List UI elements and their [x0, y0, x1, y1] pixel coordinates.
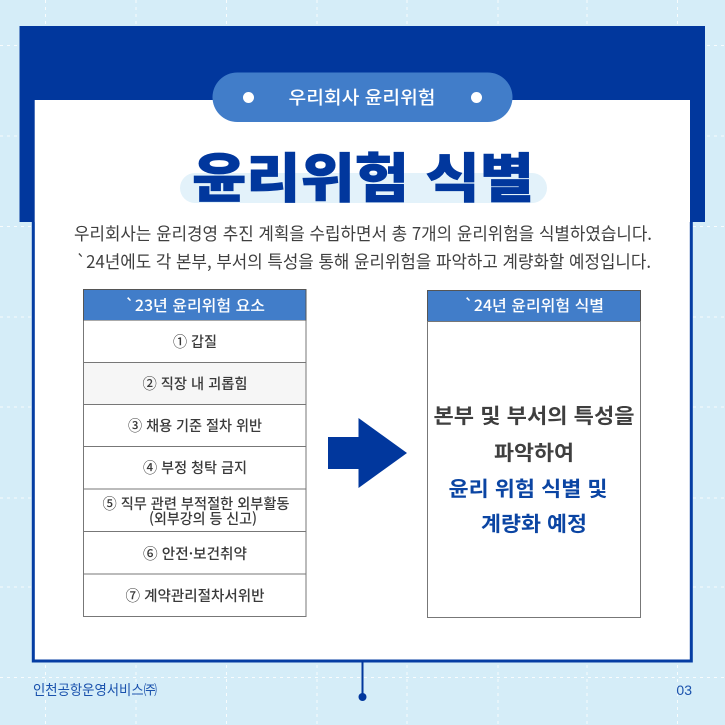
right table message: 윤리 위험 식별 및: [448, 472, 608, 502]
white card: [35, 100, 690, 660]
table rows: ② 직장 내 괴롭힘: [142, 373, 248, 394]
right table message: 계량화 예정: [481, 507, 587, 537]
footer company name: 인천공항운영서비스㈜: [33, 680, 157, 700]
pill badge: [212, 72, 512, 122]
table rows: ⑤ 직무 관련 부적절한 외부활동: [102, 493, 290, 514]
table rows: ⑥ 안전·보건취약: [143, 543, 247, 564]
right table message: [434, 399, 634, 537]
right table body: [428, 322, 640, 618]
table: 2024 ethics risk identification: [428, 290, 640, 618]
arrow: [328, 418, 407, 488]
table rows: ④ 부정 청탁 금지: [143, 457, 247, 478]
title highlight: [180, 173, 547, 203]
table rows: (외부강의 등 신고): [149, 508, 257, 529]
right table header: `24년 윤리위험 식별: [464, 294, 604, 316]
table rows: ① 갑질: [173, 331, 217, 352]
intro text: [74, 221, 652, 274]
table rows: [84, 320, 306, 616]
title: 윤리위험 식별: [192, 137, 534, 213]
page number: 03: [676, 682, 692, 698]
pill badge: 우리회사 윤리위험: [288, 84, 436, 110]
table rows: ⑦ 계약관리절차서위반: [126, 585, 264, 606]
table: 2023 ethics risk elements: [84, 290, 306, 616]
table header: [84, 290, 306, 320]
intro text: 우리회사는 윤리경영 추진 계획을 수립하면서 총 7개의 윤리위험을 식별하였습니다.: [74, 221, 652, 246]
right table message: 파악하여: [494, 436, 574, 466]
table rows: ③ 채용 기준 절차 위반: [128, 415, 262, 436]
card border: [33, 222, 691, 661]
header band: [20, 26, 705, 222]
table header: `23년 윤리위험 요소: [125, 294, 265, 316]
intro text: `24년에도 각 본부, 부서의 특성을 통해 윤리위험을 파악하고 계량화할 예정입니다.: [76, 249, 651, 274]
right table header: [428, 290, 640, 322]
connector stem with dot: [358, 661, 366, 701]
right table message: 본부 및 부서의 특성을: [434, 399, 634, 429]
